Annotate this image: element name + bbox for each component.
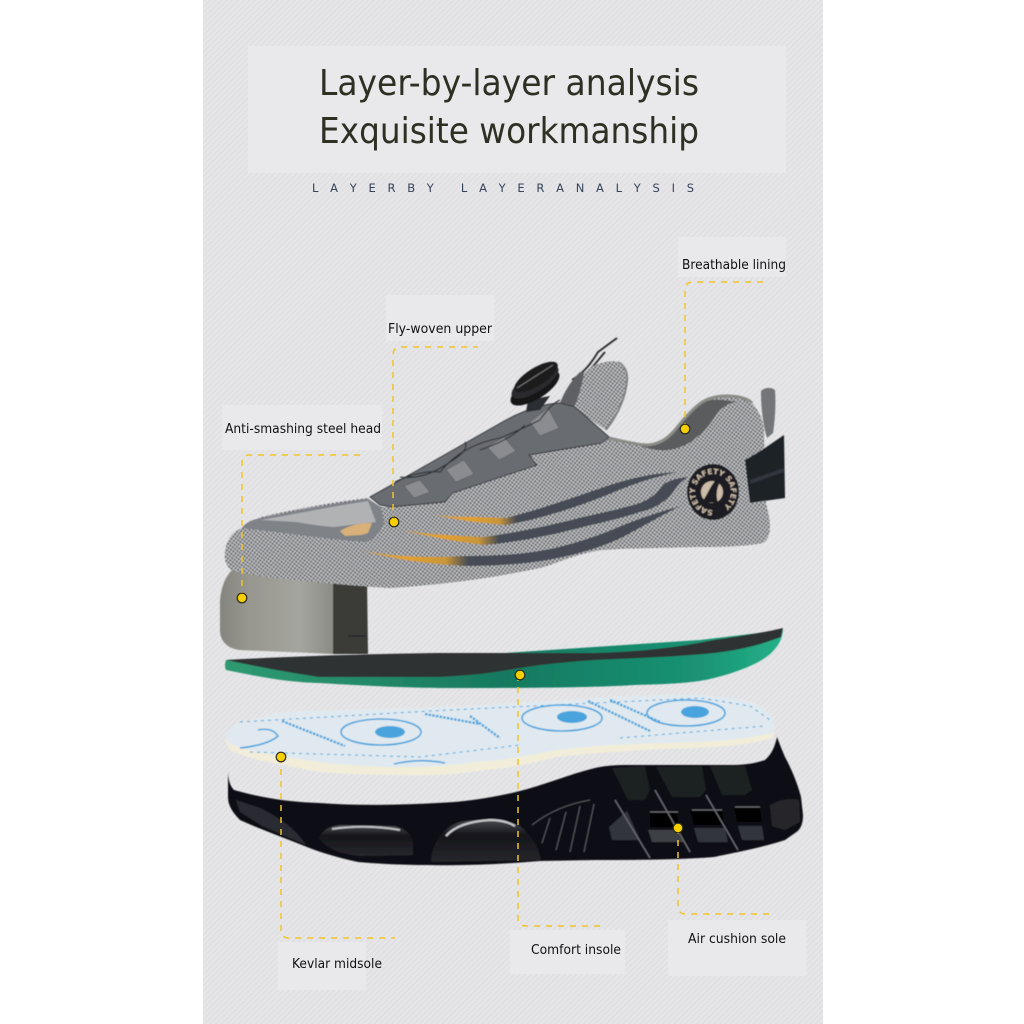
callout: kevlar midsole bbox=[276, 752, 395, 990]
callout: breathable lining: Breathable lining bbox=[682, 258, 786, 273]
kevlar midsole bbox=[226, 695, 775, 775]
insole blue print bbox=[240, 698, 773, 764]
stripe 2 bbox=[401, 477, 688, 545]
callout: comfort insole bbox=[510, 670, 625, 974]
toe light mesh bbox=[261, 501, 376, 527]
lower windows bbox=[609, 807, 764, 842]
boa dial bbox=[505, 356, 565, 412]
lace pull bbox=[572, 338, 617, 380]
callout: anti-smashing steel head: Anti-smashing steel head bbox=[225, 422, 381, 437]
heel window bbox=[236, 800, 306, 845]
heel counter strap bbox=[745, 435, 785, 503]
title block: Layer-by-layer analysis bbox=[319, 63, 699, 104]
air bubble 1 bbox=[319, 825, 413, 856]
toe bubble bbox=[770, 799, 800, 830]
title block: Exquisite workmanship bbox=[319, 111, 699, 152]
collar rim bbox=[609, 396, 752, 445]
callout: breathable lining bbox=[678, 237, 786, 434]
air cushion sole bbox=[228, 737, 803, 865]
callout: anti-smashing steel head bbox=[222, 405, 382, 603]
lace panel bbox=[370, 403, 609, 507]
stripe 1 bbox=[433, 472, 678, 525]
callout: air cushion sole: Air cushion sole bbox=[688, 932, 786, 947]
laces bbox=[395, 400, 560, 482]
black top layer bbox=[226, 628, 783, 677]
subtitle: L A Y E R B Y L A Y E R A N A L Y S I S bbox=[312, 181, 694, 195]
ribs bbox=[532, 800, 594, 852]
steel toe cap bbox=[220, 570, 368, 654]
stripe 3 bbox=[359, 506, 680, 566]
tongue bbox=[565, 361, 627, 430]
toe suede overlay bbox=[242, 499, 384, 542]
callout: fly-woven upper: Fly-woven upper bbox=[388, 322, 493, 337]
heel badge: SAFETY SAFETY SAFETY bbox=[688, 468, 738, 516]
foam insole bbox=[225, 628, 783, 688]
callout: air cushion sole bbox=[668, 823, 806, 976]
title block bbox=[248, 46, 786, 173]
shoe upper bbox=[224, 336, 786, 588]
frame lines bbox=[615, 790, 760, 858]
lace loops bbox=[404, 408, 559, 498]
upper blocks bbox=[612, 766, 752, 800]
heel pull tab bbox=[761, 388, 775, 438]
mesh body bbox=[225, 396, 770, 588]
toe orange patch bbox=[340, 523, 372, 536]
collar lining bbox=[640, 400, 736, 450]
green foam bbox=[225, 630, 783, 688]
callout: comfort insole: Comfort insole bbox=[531, 943, 621, 958]
callout: kevlar midsole: Kevlar midsole bbox=[292, 957, 382, 972]
background panel bbox=[203, 0, 823, 1024]
air bubble 2 bbox=[431, 820, 541, 862]
callout: fly-woven upper bbox=[386, 295, 494, 527]
